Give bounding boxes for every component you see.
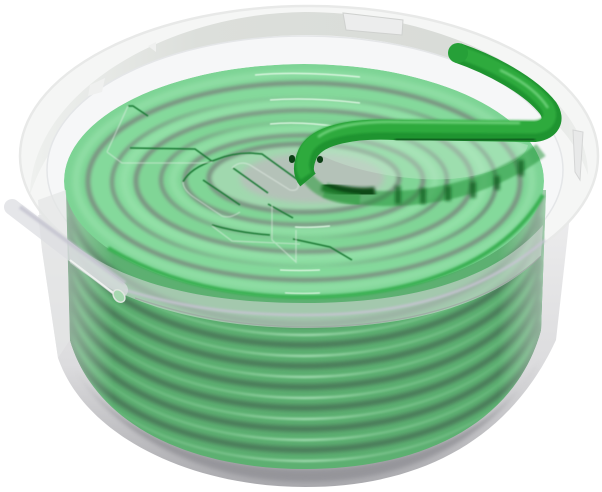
side edge haze (66, 190, 546, 469)
tub body (38, 215, 570, 487)
ring 2 (112, 98, 496, 266)
coil top rings (64, 64, 544, 298)
tube base (304, 53, 552, 180)
green tube (292, 43, 552, 200)
handle lower edge (70, 260, 120, 298)
centre hollow (240, 153, 384, 203)
tube end cap (448, 43, 468, 63)
rim lower line (135, 256, 541, 327)
ring 5 (185, 135, 423, 225)
ring 6 (209, 144, 399, 212)
coil outer saturated edge (108, 195, 543, 297)
lid channel notches (343, 13, 403, 35)
rim lilac line (125, 240, 545, 315)
handle end cap (111, 287, 127, 305)
refracted tube band (325, 150, 541, 204)
ring 4 (161, 122, 447, 238)
translucent tab outlines (107, 106, 300, 262)
tube translucent tail (308, 178, 360, 200)
handle inner stripe (20, 207, 125, 283)
lid front rim (68, 225, 545, 328)
tub inner shadow under coil (75, 360, 540, 482)
coil side wall (66, 190, 546, 469)
left handle (12, 207, 127, 305)
lid inner shelf (47, 36, 563, 304)
tube shadow (322, 186, 375, 193)
left edge lid haze (38, 190, 70, 358)
tab cut lines and outlines (107, 106, 352, 262)
side ring highlights (126, 304, 480, 464)
ring 1 (88, 83, 520, 280)
lid outer rim (20, 6, 598, 306)
tube highlight (318, 70, 548, 137)
dark green cut lines (128, 106, 352, 260)
tube body (303, 52, 550, 176)
lid inner channel (30, 12, 588, 195)
white glints (255, 73, 360, 294)
ring sheen (76, 74, 532, 288)
inner plate lighter arc (320, 130, 528, 179)
tube underside dark (395, 139, 535, 140)
dark refraction accents (398, 160, 521, 204)
ring 3 (136, 110, 472, 252)
side ring shadows (68, 196, 540, 450)
tube hole dark marks (292, 158, 320, 160)
